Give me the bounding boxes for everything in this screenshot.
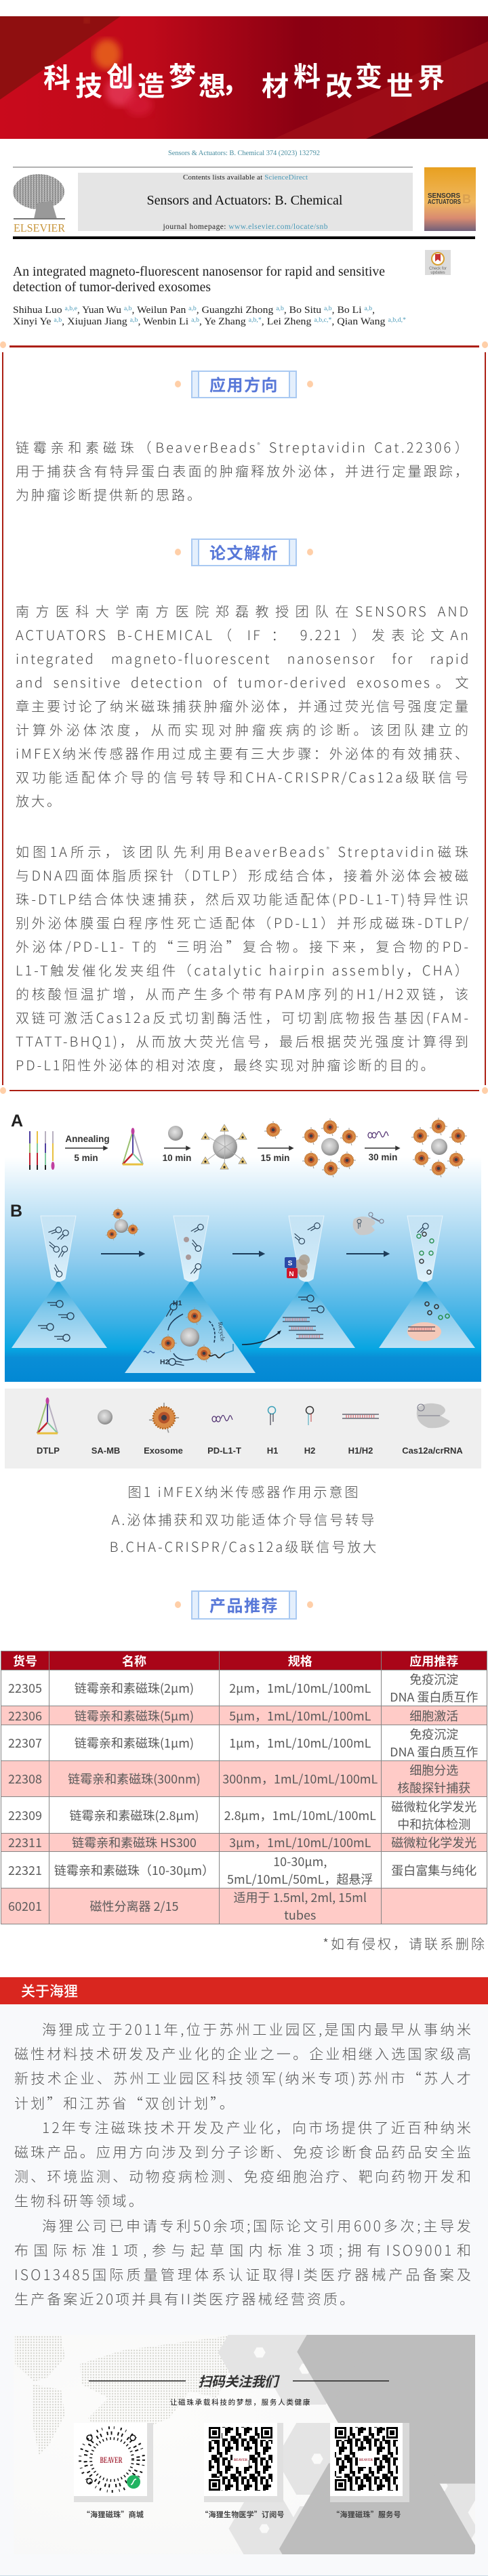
paper title: An integrated magneto-fluorescent nanosensor for rapid and sensitive	[13, 265, 385, 279]
text: application: 为肿瘤诊断提供新的思路。	[16, 484, 203, 504]
legend: H1: H1	[267, 1445, 278, 1456]
product table: 链霉亲和素磁珠(2.8μm)	[69, 1806, 199, 1823]
legend: H1/H2: H1/H2	[348, 1445, 373, 1456]
product table: 10-30μm,	[273, 1852, 327, 1870]
about text: 生产备案近20项并具有II类医疗器械经营资质。	[14, 2289, 356, 2309]
panel A: A	[11, 1112, 23, 1131]
figure caption: B.CHA-CRISPR/Cas12a级联信号放大	[110, 1536, 378, 1556]
about text: 布国际标准1项,参与起草国内标准3项;拥有ISO9001和	[14, 2240, 473, 2260]
text: application: 用于捕获含有特异蛋白表面的肿瘤释放外泌体，并进行定量跟踪，	[16, 461, 470, 480]
product table: 细胞激活	[409, 1707, 458, 1725]
product table: 名称	[122, 1651, 146, 1669]
figure 1: iMFEX schematic	[5, 1112, 481, 1469]
panel B	[10, 1202, 475, 1373]
authors: , Qian Wang	[331, 316, 388, 327]
product table: 应用推荐	[409, 1651, 458, 1669]
slogan: 世	[386, 64, 413, 104]
QR: subscription account: BEAVER	[234, 2459, 247, 2462]
heading: 产品推荐: 产品推荐	[209, 1592, 279, 1616]
panel A: 30 min	[369, 1152, 397, 1162]
text: paper analysis 1: integrated magneto-fluorescent nanosensor for rapid	[16, 648, 470, 668]
cones	[12, 1280, 107, 1348]
cone 3 products	[298, 1295, 314, 1302]
QR: mall: BEAVER	[100, 2455, 123, 2465]
authors: , Bo Situ	[284, 305, 324, 316]
product table: 免疫沉淀	[409, 1725, 458, 1743]
Elsevier logo	[13, 174, 66, 234]
authors: a,b,d,*	[388, 316, 407, 323]
authors: Shihua Luo	[13, 305, 58, 316]
authors: a,b	[276, 305, 284, 312]
panel B: B	[10, 1202, 22, 1221]
cone 1 hairpins	[47, 1301, 63, 1307]
legend: H1	[267, 1406, 278, 1456]
authors: a,b	[130, 316, 138, 323]
about text: 生物科研等领域。	[14, 2191, 145, 2211]
slogan: 改	[325, 64, 352, 104]
legend: SA-MB: SA-MB	[92, 1445, 120, 1456]
legend panel	[5, 1389, 481, 1469]
product table: 3μm，1mL/10mL/100mL	[229, 1834, 371, 1851]
text: paper analysis 2: 的核酸恒温扩增，从而产生多个带有PAM序列的H1/H2双链，该	[16, 984, 470, 1003]
cone 2 reaction	[180, 1328, 199, 1347]
product table: 22309	[8, 1806, 42, 1823]
text: paper analysis 2: 别外泌体膜蛋白程序性死亡适配体（PD-L1）并形成磁珠-DTLP/	[16, 912, 470, 932]
slogan: 界	[418, 56, 445, 96]
small bead cluster	[115, 1219, 128, 1233]
product table: 链霉亲和素磁珠(5μm)	[75, 1707, 194, 1725]
panel A: 5 min	[74, 1153, 98, 1163]
text: paper analysis 1: 放大。	[16, 790, 62, 810]
legend: Cas12a/crRNA: Cas12a/crRNA	[402, 1445, 463, 1456]
about bar: 关于海狸	[21, 1981, 78, 2001]
text: paper analysis 1: ACTUATORS B-CHEMICAL（ IF ： 9.221 ）发表论文An	[16, 625, 470, 644]
product table: 磁微粒化学发光	[391, 1798, 476, 1815]
world map dots	[15, 2336, 234, 2459]
authors: Xinyi Ye	[13, 316, 48, 327]
product table: 磁性分离器 2/15	[89, 1897, 179, 1915]
magnet: N	[289, 1271, 294, 1278]
QR: mall: “海狸磁珠”商城	[83, 2509, 144, 2520]
product table: 蛋白富集与纯化	[391, 1861, 476, 1879]
heading: 产品推荐	[175, 1590, 313, 1620]
slogan: 创	[106, 55, 134, 94]
about text: 12年专注磁珠技术开发及产业化，向市场提供了近百种纳米	[42, 2117, 473, 2138]
product table: 链霉亲和素磁珠（10-30μm）	[54, 1861, 214, 1879]
legend: H2: H2	[304, 1445, 315, 1456]
authors	[13, 305, 407, 327]
text: paper analysis 2: L1-T触发催化发夹组件（catalytic hairpin assembly，CHA）	[16, 960, 470, 979]
authors: a,b	[124, 305, 132, 312]
slogan: 材	[262, 64, 289, 104]
disclaimer: *如有侵权，请联系删除	[323, 1933, 487, 1953]
bead with exosomes	[321, 1138, 339, 1156]
product table: 磁微粒化学发光	[391, 1834, 476, 1851]
authors: a,b	[324, 305, 332, 312]
panel B: Recycle	[217, 1322, 226, 1342]
slogan: 造	[138, 64, 165, 104]
legend: Cas12a/crRNA	[402, 1403, 463, 1456]
heading: 应用方向: 应用方向	[209, 372, 279, 396]
about text: 磁珠产品。应用方向涉及到分子诊断、免疫诊断食品药品安全监	[14, 2142, 473, 2162]
legend: DTLP	[37, 1397, 60, 1456]
about section background	[0, 2004, 488, 2575]
panel A: 15 min	[261, 1153, 289, 1163]
journal box	[78, 173, 413, 231]
authors: , Lei Zheng	[262, 316, 314, 327]
product table: 细胞分选	[409, 1761, 458, 1779]
legend: H1/H2	[342, 1414, 379, 1456]
about bar	[0, 1977, 488, 2004]
strands	[30, 1131, 54, 1170]
QR: service account	[330, 2423, 409, 2520]
product table: 货号	[13, 1651, 37, 1669]
product table: 22306	[8, 1707, 42, 1725]
text: paper analysis 2: 外泌体/PD-L1- T的“三明治”复合物。接下来，复合物的PD-	[16, 936, 470, 956]
slogan: ，	[222, 60, 249, 100]
title: 让磁珠承载科技的梦想，服务人类健康	[170, 2397, 311, 2407]
authors: , Weilun Pan	[131, 305, 188, 316]
check for updates	[425, 250, 451, 275]
hexagons	[236, 2332, 485, 2562]
authors: a,b	[364, 305, 373, 312]
product table: DNA 蛋白质互作	[390, 1688, 478, 1706]
journal cover: SENSORS	[428, 192, 460, 200]
journal header	[13, 150, 476, 327]
text: paper analysis 2: 双链可激活Cas12a反式切割酶活性，可切割底物报告基因(FAM-	[16, 1007, 470, 1027]
legend: PD-L1-T: PD-L1-T	[207, 1445, 241, 1456]
product table: 5mL/10mL/50mL，超悬浮	[227, 1870, 373, 1887]
text: paper analysis 1: 计算外泌体浓度，从而实现对肿瘤疾病的诊断。该团队建立的	[16, 719, 470, 739]
journal cover	[424, 167, 476, 231]
text: paper analysis 2: TTATT-BHQ1)，从而放大荧光信号，最后根据荧光强度计算得到	[16, 1031, 470, 1051]
product table: 链霉亲和素磁珠(1μm)	[75, 1734, 194, 1752]
text: paper analysis 2	[16, 841, 470, 1074]
authors: , Xiujuan Jiang	[62, 316, 130, 327]
text: paper analysis 2: PD-L1阳性外泌体的相对浓度，最终实现对肿瘤诊断的目的。	[16, 1055, 436, 1074]
about text: 新技术企业、苏州工业园区科技领军(纳米专项)苏州市“苏人才	[14, 2068, 473, 2088]
journal box: journal homepage: www.elsevier.com/locate/snb	[163, 223, 328, 231]
text: paper analysis 1	[16, 600, 470, 810]
product table: 1μm，1mL/10mL/100mL	[229, 1734, 371, 1752]
slogan	[43, 55, 445, 104]
authors: a,b,e	[65, 305, 77, 312]
product table: 核酸探针捕获	[397, 1779, 470, 1796]
QR: mall	[74, 2423, 153, 2520]
figure caption: A.泌体捕获和双功能适体介导信号转导	[112, 1509, 376, 1528]
slogan: 科	[43, 56, 70, 96]
authors: , Bo Li	[332, 305, 364, 316]
about text	[14, 2019, 473, 2309]
authors: , Ye Zhang	[199, 316, 249, 327]
legend: DTLP: DTLP	[37, 1445, 60, 1456]
text: paper analysis 1: and sensitive detection of tumor-derived exosomes。文	[16, 672, 470, 692]
text: paper analysis 1: 南方医科大学南方医院郑磊教授团队在SENSORS AND	[16, 600, 470, 620]
about text: 测、环境监测、动物疫病检测、免疫细胞治疗、靶向药物开发和	[14, 2166, 473, 2187]
product table: DNA 蛋白质互作	[390, 1743, 478, 1760]
product table	[1, 1651, 487, 1924]
authors: a,b	[191, 316, 199, 323]
authors: , Yuan Wu	[77, 305, 124, 316]
panel A	[11, 1112, 467, 1177]
QR: service account: “海狸磁珠”服务号	[332, 2509, 401, 2520]
text: application: 链霉亲和素磁珠（BeaverBeads® Streptavidin Cat.22306）	[16, 436, 470, 457]
about text: 海狸公司已申请专利50余项;国际论文引用600多次;主导发	[42, 2216, 473, 2236]
legend: Exosome: Exosome	[144, 1445, 183, 1456]
product table: 适用于 1.5ml, 2ml, 15ml	[234, 1888, 367, 1906]
product table: 22321	[8, 1861, 42, 1879]
slogan: 变	[355, 55, 382, 94]
slogan: 想	[199, 64, 226, 104]
about text: 计划”和江苏省“双创计划”。	[14, 2093, 236, 2113]
figure caption: 图1 iMFEX纳米传感器作用示意图	[128, 1481, 360, 1501]
arrows	[101, 1252, 388, 1256]
product table: 规格	[288, 1651, 312, 1669]
about text: 海狸成立于2011年,位于苏州工业园区,是国内最早从事纳米	[42, 2019, 473, 2040]
authors: a,b,c,*	[314, 316, 332, 323]
product table: 5μm，1mL/10mL/100mL	[229, 1707, 371, 1725]
paper title	[13, 265, 385, 295]
banner	[0, 16, 488, 139]
frame: red border of text panel	[0, 341, 488, 1094]
journal cover: B	[462, 192, 471, 206]
product table: 中和抗体检测	[397, 1815, 470, 1833]
journal box: Sensors and Actuators: B. Chemical	[146, 193, 343, 208]
check for updates: Check for	[429, 267, 447, 271]
product table: 22307	[8, 1734, 42, 1752]
title	[89, 2371, 389, 2407]
paper title: detection of tumor-derived exosomes	[13, 280, 211, 295]
product table: 链霉亲和素磁珠(300nm)	[68, 1770, 201, 1788]
product table: 免疫沉淀	[409, 1670, 458, 1688]
magnet	[285, 1257, 298, 1278]
text: paper analysis 1: 双功能适配体介导的信号转导和CHA-CRISPR/Cas12a级联信号	[16, 767, 470, 786]
slogan: 梦	[169, 55, 196, 94]
authors: , Wenbin Li	[138, 316, 191, 327]
gradient background	[5, 1111, 481, 1382]
legend: Exosome	[144, 1403, 183, 1456]
panel A: 10 min	[163, 1153, 191, 1163]
heading: 论文解析	[175, 539, 313, 566]
journal box: Contents lists available at ScienceDirect	[183, 173, 308, 182]
slogan: 料	[293, 55, 321, 94]
product table: 链霉亲和素磁珠(2μm)	[75, 1679, 194, 1697]
check for updates: updates	[430, 271, 445, 275]
authors: ,	[372, 305, 375, 316]
cone 4 cleavage	[407, 1322, 441, 1341]
journal cover: ACTUATORS	[428, 198, 461, 206]
panel B: H1	[173, 1299, 182, 1307]
product table: 22311	[8, 1834, 42, 1851]
slogan: 技	[75, 64, 102, 104]
magnet: S	[288, 1260, 293, 1267]
product table: 300nm，1mL/10mL/100mL	[222, 1770, 378, 1788]
text: paper analysis 1: 章主要讨论了纳米磁珠捕获肿瘤外泌体，并通过荧光信号强度定量	[16, 696, 470, 715]
text: paper analysis 2: 珠-DTLP结合体快速捕获，然后双功能适配体(PD-L1-T)特异性识	[16, 889, 470, 908]
citation: Sensors & Actuators: B. Chemical 374 (2023) 132792	[168, 150, 320, 157]
product table: 2.8μm，1mL/10mL/100mL	[224, 1806, 376, 1823]
product table: 22308	[8, 1770, 42, 1788]
QR: subscription account: “海狸生物医学”订阅号	[201, 2509, 285, 2520]
text: application	[16, 436, 470, 504]
product table: tubes	[284, 1906, 316, 1924]
authors: a,b,*	[249, 316, 262, 323]
QR: service account: BEAVER	[359, 2459, 373, 2462]
Elsevier logo: ELSEVIER	[14, 221, 66, 234]
authors: a,b	[188, 305, 197, 312]
heading: 论文解析: 论文解析	[209, 540, 279, 564]
authors: , Guangzhi Zhong	[197, 305, 276, 316]
hairpins in tubes	[48, 1226, 62, 1236]
title: 扫码关注我们	[198, 2371, 280, 2390]
legend: H2	[304, 1406, 315, 1456]
QR: subscription account	[201, 2423, 285, 2520]
text: paper analysis 2: 与DNA四面体脂质探针（DTLP）形成结合体，接着外泌体会被磁	[16, 865, 470, 885]
text: paper analysis 1: iMFEX纳米传感器作用过成主要有三大步骤：外泌体的有效捕获、	[16, 743, 470, 763]
bead with DTLP	[213, 1135, 237, 1159]
figure caption	[110, 1481, 378, 1556]
product table: 2μm，1mL/10mL/100mL	[229, 1679, 371, 1697]
panel B: H2	[160, 1358, 169, 1366]
product table: 22305	[8, 1679, 42, 1697]
legend: SA-MB	[92, 1410, 120, 1456]
product table: 60201	[8, 1897, 42, 1915]
panel A: Annealing	[65, 1134, 110, 1144]
QR panel	[15, 2335, 475, 2554]
Cas12a top	[353, 1217, 375, 1235]
tubes	[41, 1216, 443, 1282]
process arrows	[65, 1146, 399, 1150]
bead with complex	[431, 1139, 447, 1155]
heading: 应用方向	[175, 371, 313, 398]
about text: ISO13485国际质量管理体系认证取得I类医疗器械产品备案及	[14, 2264, 473, 2285]
text: paper analysis 2: 如图1A所示，该团队先利用BeaverBeads® Streptavidin磁珠	[16, 841, 470, 860]
authors: a,b	[54, 316, 62, 323]
product table: 链霉亲和素磁珠 HS300	[72, 1834, 197, 1851]
about text: 磁性材料技术研发及产业化的企业之一。企业相继入选国家级高	[14, 2044, 473, 2064]
legend: PD-L1-T	[207, 1416, 241, 1456]
